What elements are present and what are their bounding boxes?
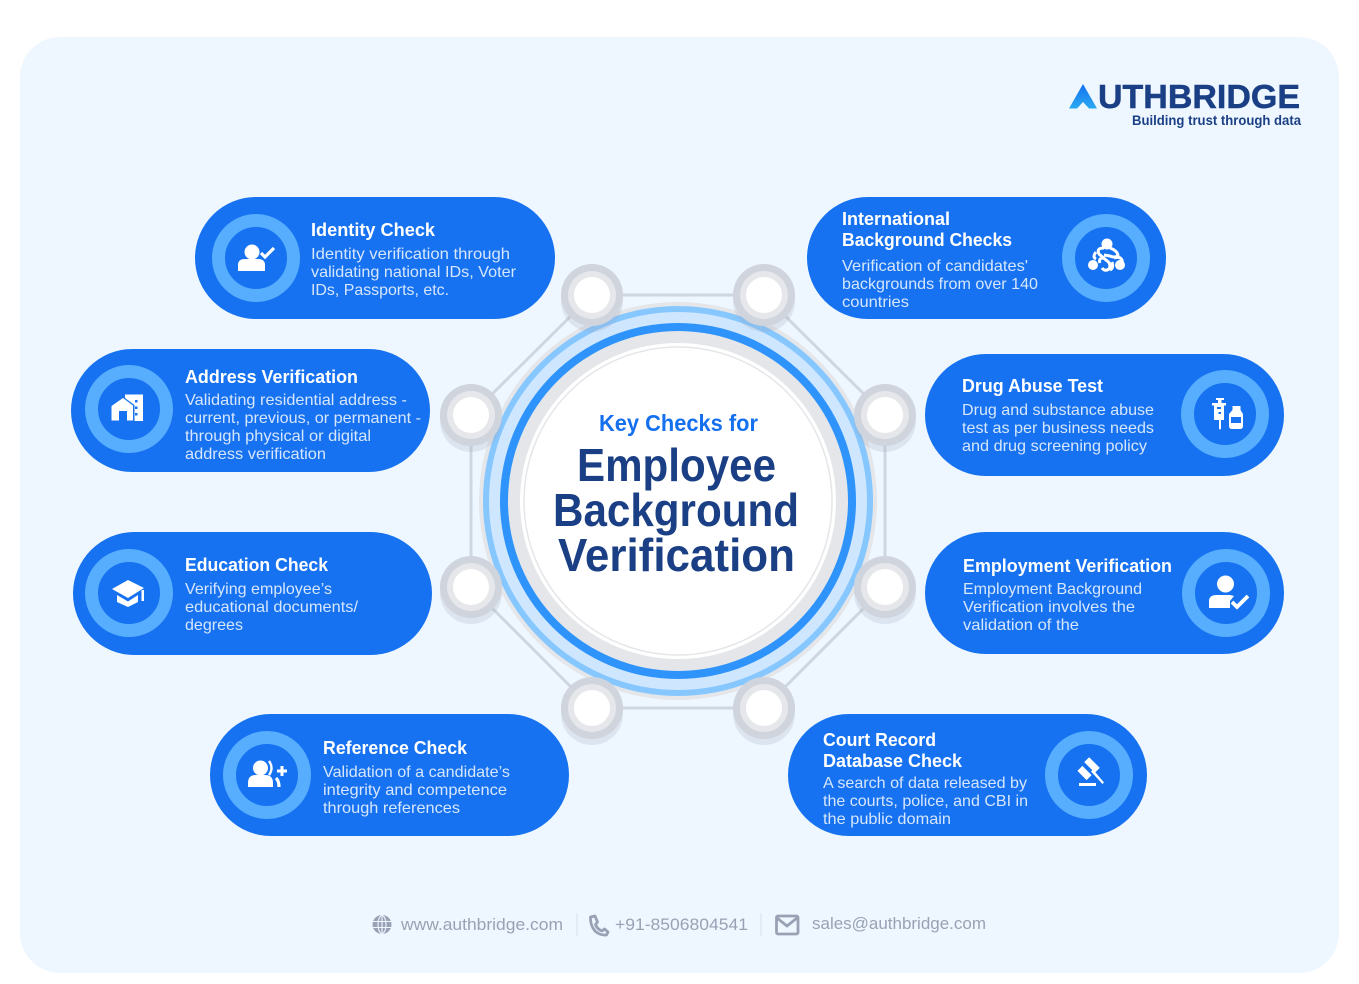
description: Verification involves the xyxy=(963,599,1135,616)
icon: linked network xyxy=(1088,238,1125,270)
description xyxy=(962,402,1154,455)
icon: person with large check xyxy=(1209,576,1248,608)
logo mark xyxy=(1069,84,1097,108)
heading: Background Checks xyxy=(842,229,1012,250)
description: IDs, Passports, etc. xyxy=(311,282,449,299)
icon: house and building xyxy=(112,394,143,421)
description: Drug and substance abuse xyxy=(962,402,1154,419)
panel: international background checks xyxy=(807,197,1166,319)
light blue ring xyxy=(483,306,873,696)
central title xyxy=(553,439,799,581)
central title: Employee xyxy=(577,439,776,491)
white core xyxy=(520,343,836,659)
description: test as per business needs xyxy=(962,420,1154,437)
icon: gavel xyxy=(1077,757,1104,786)
description: Validating residential address - xyxy=(185,392,407,409)
panel: court record database check xyxy=(788,714,1147,836)
description xyxy=(185,581,359,634)
inner grey ring xyxy=(508,331,848,671)
description: and drug screening policy xyxy=(962,438,1147,455)
description: validating national IDs, Voter xyxy=(311,264,517,281)
description xyxy=(842,258,1038,311)
icon: syringe and vial xyxy=(1212,398,1243,430)
heading: Identity Check xyxy=(311,219,436,240)
description: Validation of a candidate’s xyxy=(323,764,510,781)
description: address verification xyxy=(185,446,326,463)
strong blue ring xyxy=(500,323,856,679)
description: current, previous, or permanent - xyxy=(185,410,421,427)
description xyxy=(185,392,421,463)
description: Identity verification through xyxy=(311,246,510,263)
central title: Background xyxy=(553,484,799,536)
description: validation of the xyxy=(963,617,1079,634)
description xyxy=(823,775,1028,828)
icon: people with plus xyxy=(248,760,287,787)
heading: Employment Verification xyxy=(963,555,1172,576)
panel: education check xyxy=(73,532,432,655)
icon: person with check xyxy=(238,244,274,271)
footer contacts xyxy=(372,913,986,936)
panel: address verification xyxy=(71,349,430,472)
description: through physical or digital xyxy=(185,428,371,445)
icon: graduation cap xyxy=(112,580,144,607)
heading: Education Check xyxy=(185,554,329,575)
panel: identity check xyxy=(195,197,555,319)
description: educational documents/ xyxy=(185,599,359,616)
heading xyxy=(842,208,1012,250)
description: A search of data released by xyxy=(823,775,1027,792)
phone number: +91-8506804541 xyxy=(615,915,748,934)
icon: phone xyxy=(590,916,608,935)
description xyxy=(963,581,1142,634)
logo xyxy=(1069,78,1301,128)
heading: Drug Abuse Test xyxy=(962,375,1103,396)
central circle xyxy=(479,302,877,700)
heading: Reference Check xyxy=(323,737,468,758)
logo wordmark: UTHBRIDGE xyxy=(1098,78,1300,115)
icon: globe xyxy=(372,915,392,934)
website: www.authbridge.com xyxy=(400,915,563,934)
connector octagon xyxy=(471,295,885,708)
description: the public domain xyxy=(823,811,951,828)
email: sales@authbridge.com xyxy=(812,914,986,933)
description: countries xyxy=(842,294,909,311)
outer grey ring xyxy=(479,302,877,700)
description: Verifying employee’s xyxy=(185,581,332,598)
heading: International xyxy=(842,208,950,229)
heading: Database Check xyxy=(823,750,963,771)
icon: envelope xyxy=(776,916,798,934)
panel: drug abuse test xyxy=(925,354,1284,476)
pale blue ring xyxy=(489,312,867,690)
description xyxy=(311,246,517,299)
connector nodes xyxy=(440,264,916,745)
description: backgrounds from over 140 xyxy=(842,276,1038,293)
panel: reference check xyxy=(210,714,569,836)
description: Employment Background xyxy=(963,581,1142,598)
panel: employment verification xyxy=(925,532,1284,654)
heading xyxy=(823,729,963,771)
description: through references xyxy=(323,800,460,817)
description: integrity and competence xyxy=(323,782,507,799)
description xyxy=(323,764,510,817)
heading: Court Record xyxy=(823,729,936,750)
description: the courts, police, and CBI in xyxy=(823,793,1028,810)
central subtitle: Key Checks for xyxy=(599,410,758,436)
central title: Verification xyxy=(558,529,795,581)
logo tagline: Building trust through data xyxy=(1132,112,1301,128)
heading: Address Verification xyxy=(185,366,358,387)
description: degrees xyxy=(185,617,243,634)
description: Verification of candidates' xyxy=(842,258,1028,275)
